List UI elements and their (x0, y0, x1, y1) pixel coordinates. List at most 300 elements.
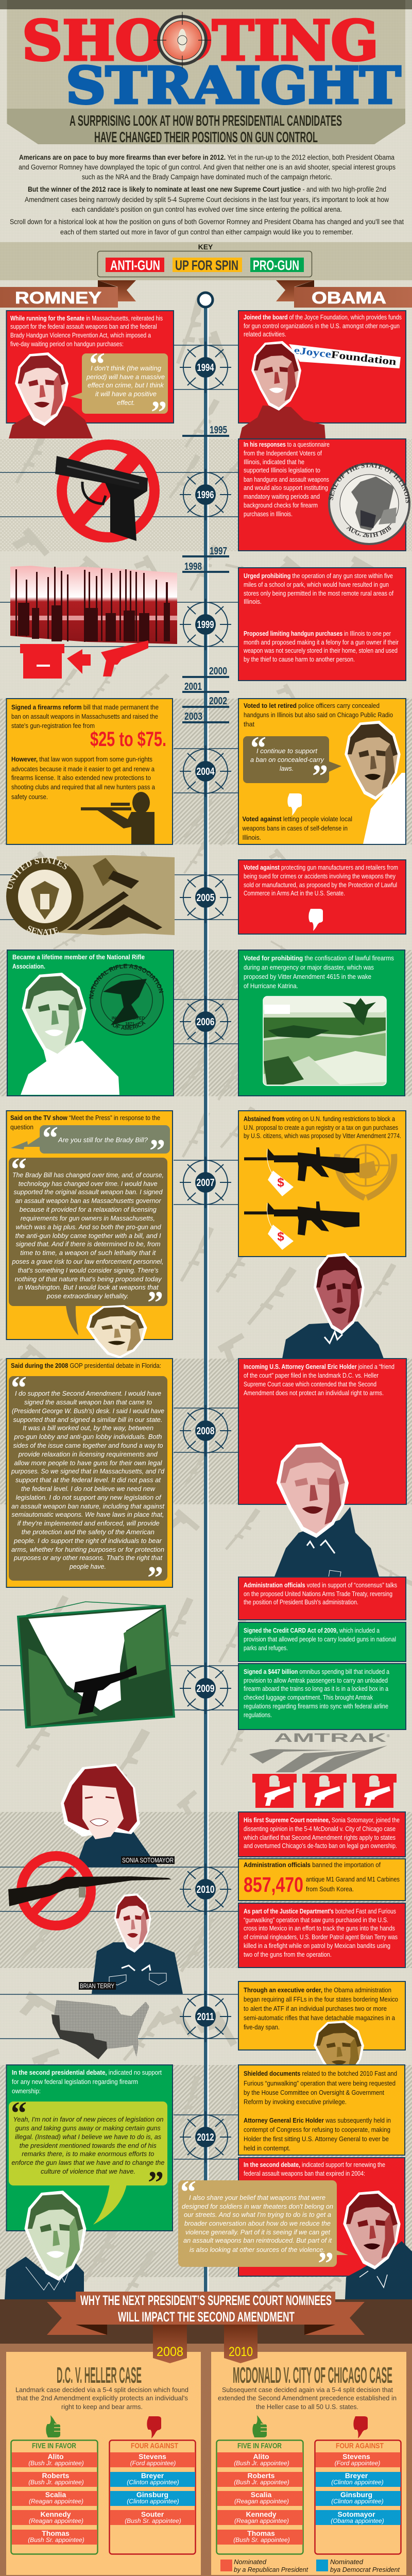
panel: Fast and Furious: As part of the Justice Department's botched Fast and Furious (244, 1907, 396, 1915)
legend: Republican: Nominated (234, 2558, 267, 2566)
portrait: Obama 1994 (239, 341, 325, 438)
icon: gun lock box with arrow (20, 640, 148, 679)
vote box: five in favor: (Reagan appointee) (29, 2517, 83, 2524)
text: purchase limits: by the thief to cause harm to another person. (244, 655, 355, 663)
icon: shooter (81, 792, 154, 844)
seal: NRA: 1871 (125, 1022, 134, 1026)
tick: 1995: 1995 (210, 425, 227, 436)
text: questionnaire: mandatory waiting periods and (244, 493, 320, 500)
panel: Romney 2007 (6, 1111, 173, 1340)
callout: fee: $25 to $75. (90, 728, 166, 751)
quote bubble: the president mentioned towards the end of his (20, 2142, 157, 2149)
panel: Obama 2006 (238, 950, 405, 1096)
text: contempt of Congress: Holder the first sitting U.S. Attorney General to ever be (244, 2135, 389, 2143)
portrait: Bush (274, 1443, 379, 1583)
year marker: 2010: 2010 (197, 1884, 214, 1895)
key label: KEY (198, 243, 213, 251)
quote bubble: legislation. I do not support any new legislation of (16, 1494, 162, 1501)
text: shielded documents: Reform by invoking executive privilege. (244, 2098, 347, 2106)
tick: 2001: 2001 (184, 681, 202, 692)
legend: Democrat: Nominated (330, 2558, 364, 2566)
tick: 2003 (182, 711, 229, 723)
description (218, 2386, 397, 2411)
answer bubble: ” (147, 1285, 163, 1320)
quote bubble: people have. (69, 1563, 106, 1570)
panel: executive order: semi-automatic rifles that have detachable magazines in a (244, 2014, 396, 2022)
emblem: United Nations (337, 1145, 394, 1198)
year marker: 2007 (180, 1157, 231, 1208)
panel: Romney 2008 (6, 1359, 173, 1596)
year marker: 2004 (180, 745, 231, 797)
quote bubble: semiautomatic weapons. We have laws in place that, (11, 1511, 164, 1518)
quote bubble: laws. (280, 765, 294, 772)
timeline start marker (198, 293, 213, 307)
year marker: 2005 (180, 872, 231, 923)
ban sign with pistol (55, 445, 154, 541)
tick: 2000: 2000 (209, 666, 227, 677)
tick: 1998: 1998 (184, 561, 202, 572)
vote box: five in favor: (Bush Jr. appointee) (234, 2479, 289, 2486)
icon: thumbs down (287, 793, 302, 816)
panel: Romney 2012 (6, 2065, 173, 2231)
text: retired police: Voted to let retired police officers carry concealed (244, 702, 380, 709)
ribbon tag: 2010: 2010 (229, 2345, 253, 2359)
seal: Illinois (328, 463, 410, 545)
question bubble: ” (149, 1133, 165, 1168)
text: Joyce board (244, 313, 402, 338)
intro text: But the winner of the 2012 race is likely to nominate at least one new Supreme Court justice - and with two high-profile 2nd (28, 185, 386, 193)
logo: Amtrak: AMTRAK (274, 1731, 387, 1745)
quote bubble: Obama 2012: designed for soldiers in war theaters don't belong on (182, 2202, 333, 2210)
vote box: four against: (Bush Sr. appointee) (125, 2517, 181, 2524)
quote bubble: pro-gun lobby and anti-gun lobby individuals. Both (14, 1433, 162, 1440)
vote box: four against (109, 2440, 196, 2554)
year marker: 2006: 2006 (197, 1016, 214, 1028)
year marker: 2012 (180, 2111, 231, 2163)
panel: executive order (238, 1981, 405, 2050)
banner: Supreme Court heading (47, 2292, 365, 2335)
quote bubble (71, 347, 168, 430)
panel: import ban (238, 1859, 405, 1901)
panel: Obama 2005 (238, 860, 406, 934)
text: questionnaire (244, 440, 330, 518)
text: firearms reform: state's gun-registration fee from (11, 722, 95, 730)
text: voted against (242, 815, 352, 841)
answer bubble: “ (11, 1152, 27, 1187)
text: contempt of Congress: held in contempt. (244, 2144, 290, 2152)
image: US Senate seal and pistol: UNITED STATES (6, 857, 68, 889)
quote bubble (9, 1370, 167, 1596)
year marker: 1994: 1994 (197, 362, 214, 374)
panel: omnibus bill: regulations regarding firearms into sync with federal airline (244, 1702, 388, 1710)
brown band and lower section (0, 2299, 412, 2576)
text: lawful commerce: Commerce in Arms Act in the U.S. Senate. (244, 889, 345, 897)
description: the Heller case to all 50 U.S. states. (256, 2403, 358, 2411)
vote box: four against: Sotomayor (337, 2510, 375, 2518)
text: purchase limits (243, 630, 399, 663)
panel: omnibus bill: provision to allow Amtrak passengers to carry an unloaded (244, 1676, 388, 1684)
text: questionnaire: ban handguns and assault weapons (244, 476, 329, 483)
panel: Obama 2004 (238, 699, 406, 844)
vote box: four against: Ginsburg (136, 2490, 168, 2499)
vote box: five in favor: (Bush Sr. appointee) (28, 2536, 84, 2544)
panel: Romney 2004 (6, 699, 173, 844)
text: rifles from Korea: from South Korea. (306, 1885, 354, 1893)
year marker: 2012: 2012 (197, 2132, 214, 2143)
ribbon: Obama: OBAMA (312, 289, 386, 307)
text: firearms reform: Signed a firearms reform bill that made permanent the (11, 703, 159, 711)
text: contempt of Congress: Attorney General Eric Holder was subsequently held in (244, 2116, 391, 2124)
quote bubble: ” (147, 1561, 163, 1596)
ribbon tag: 2008: 2008 (157, 2345, 183, 2359)
icon: thumbs down (147, 2416, 161, 2438)
tick: 2002 (182, 696, 229, 708)
legend: Republican (220, 2558, 308, 2573)
panel: Credit CARD Act: parks and refuges. (244, 1644, 288, 1652)
panel: Credit CARD Act: Signed the Credit CARD Act of 2009, which included a (244, 1626, 380, 1634)
text: voted against: weapons bans in cases of self-defense in (242, 824, 348, 832)
vote box: four against: (Clinton appointee) (331, 2498, 384, 2505)
text: retired police: handguns in Illinois but also said on Chicago Public Radio (244, 711, 393, 719)
quote bubble: illegal. (Instead) what I believe we have to do is, as (15, 2133, 161, 2141)
panel: Obama 2007 (238, 1111, 406, 1257)
vote box: five in favor: Kennedy (40, 2510, 71, 2518)
text: however: However, that law won support from some gun-rights (11, 755, 152, 763)
intro text: Amendment cases being narrowly decided by split 5-4 Supreme Court decisions in the last four years, it's important to look at how (25, 196, 389, 204)
text: shielded documents: Furious “gunwalking” operation that were being requested (244, 2079, 396, 2087)
legend: Democrat (316, 2558, 400, 2573)
text: NRA membership (12, 953, 145, 970)
text: gun stores: Urged prohibiting the operation of any gun store within five (244, 572, 393, 580)
vote box: five in favor: FIVE IN FAVOR (237, 2442, 282, 2450)
quote bubble: period) will have a massive (86, 373, 165, 381)
logo: Joyce Foundation: eJoyce Foundation (293, 345, 397, 368)
text: friend of the court: Amendment does not protect an individual right to arms. (244, 1389, 384, 1397)
text: Katrina vote (244, 954, 394, 990)
rifle with price tag: $ (277, 1176, 284, 1190)
vote box: four against: Breyer (141, 2471, 164, 2480)
text: however (11, 755, 156, 801)
vote box: four against: Breyer (345, 2471, 368, 2480)
text: questionnaire: and would also support instituting (244, 484, 328, 492)
text: contempt of Congress (244, 2116, 391, 2152)
vote box: five in favor: FIVE IN FAVOR (32, 2442, 76, 2450)
answer bubble: which was a big plus. And so both the pro-gun and (16, 1223, 161, 1231)
panel: Credit CARD Act (238, 1622, 406, 1662)
text: second debate: for any new federal legislation regarding firearm (12, 2078, 138, 2086)
text: however: shooting clubs and required that all new hunters pass a (11, 783, 156, 791)
text: friend of the court: Incoming U.S. Attorney General Eric Holder joined a “friend (244, 1363, 394, 1370)
quote bubble: guns and taking guns away or making certain guns (15, 2124, 161, 2132)
text: second debate: ownership: (12, 2087, 41, 2095)
question bubble: “ (42, 1121, 58, 1156)
text: lawful commerce (244, 863, 398, 897)
text: Senate run: Brady Handgun Violence Prevention Act, which imposed a (10, 331, 151, 339)
icon: thumbs down (308, 909, 323, 931)
text: Senate run (10, 314, 163, 348)
text: Katrina vote: proposed by Vitter Amendment 4615 in the wake (244, 973, 371, 980)
answer bubble: because it provided for a relaxation of licensing (20, 1206, 157, 1213)
vote box: five in favor: (Bush Jr. appointee) (28, 2479, 84, 2486)
quote bubble: Obama 2012: “ (180, 2175, 196, 2210)
quote bubble: the federal level. I do not believe we need new (21, 1485, 156, 1493)
portrait: Brian Terry (92, 1893, 183, 1994)
year marker: 2010 (180, 1863, 231, 1915)
text: purchase limits: Proposed limiting handgun purchases in Illinois to one per (244, 630, 391, 637)
text: Senate run: support for the federal assault weapons ban and the federal (10, 323, 157, 330)
answer bubble: time to time, a weapon of such lethality that it (20, 1249, 157, 1257)
year marker: 2004: 2004 (197, 766, 215, 777)
vote box: four against: (Ford appointee) (335, 2460, 380, 2467)
panel: Fast and Furious: two of the guns from the operation. (244, 1951, 332, 1958)
answer bubble: pose extraordinary lethality. (46, 1292, 129, 1300)
vote box: five in favor (11, 2440, 98, 2554)
text: retired police (244, 702, 393, 728)
year marker: 2011 (180, 1991, 231, 2042)
title: SHOOTING (22, 8, 379, 73)
map: US with border states (52, 2000, 149, 2059)
vote box: five in favor: Thomas (247, 2529, 275, 2537)
logo: Amtrak (249, 1731, 390, 1772)
quote bubble: Obama 2012: I also share your belief that weapons that were (189, 2194, 325, 2201)
key box (98, 251, 312, 277)
quote bubble: (President George W. Bush's) desk. I said I would have (12, 1407, 164, 1415)
text: Meet the Press (10, 1114, 160, 1131)
description: that the 2nd Amendment explicitly protects an individual's (16, 2394, 188, 2402)
icon: target scope over the O (153, 12, 211, 69)
text: gun stores (244, 572, 393, 605)
rifle with price tag: $ (277, 1230, 284, 1244)
text: firearms reform (11, 703, 159, 730)
chip: pro-gun: PRO-GUN (253, 258, 299, 273)
answer bubble: signed that. And if there is determined to be, from (16, 1240, 161, 1248)
quote bubble: “ (250, 731, 266, 766)
vote box: four against: (Clinton appointee) (127, 2498, 179, 2505)
panel: Administration UN talks: Administration officials voted in support of “consensus” talks (244, 1581, 397, 1589)
answer bubble: supported the original assault weapon ban. I signed (13, 1188, 163, 1196)
panel: Administration UN talks (238, 1577, 406, 1620)
text: Joyce board: related activities. (244, 330, 286, 338)
image: US Senate seal and pistol (6, 855, 175, 935)
intro text (10, 154, 404, 236)
icons: locked gun boxes (252, 1774, 397, 1808)
year marker: 1999 (180, 599, 231, 650)
text: firearms reform: ban on assault weapons in Massachusetts and raised the (11, 713, 158, 720)
panel: Obama 2008 (238, 1359, 406, 1504)
panel: executive order: Through an executive order, the Obama administration (244, 1986, 391, 1994)
chip: up for spin: UP FOR SPIN (175, 258, 238, 273)
text: rifles from Korea (306, 1875, 400, 1893)
portrait: Obama sepia (345, 721, 405, 844)
quote bubble: I do support the Second Amendment. I would have (15, 1389, 161, 1397)
quote bubble: “ (11, 2096, 27, 2131)
quote bubble: a ban on concealed-carry (250, 756, 324, 764)
answer bubble: nothing of that nature that's being proposed today (15, 1275, 162, 1283)
year marker: 2006 (180, 996, 231, 1047)
quote bubble: Obama 2012: is also looking at other sources of the violence. (190, 2246, 325, 2253)
panel: Fast and Furious (238, 1903, 405, 1968)
text: friend of the court (244, 1363, 394, 1397)
text: shielded documents: Shielded documents related to the botched 2010 Fast and (244, 2070, 397, 2077)
text: contempt of Congress: contempt of Congress for refusing to cooperate, making (244, 2126, 390, 2133)
panel: Heller case: D.C. V. HELLER CASE (57, 2363, 142, 2388)
vote box: five in favor: (Reagan appointee) (234, 2498, 289, 2505)
description: Subsequent case decided again via a 5-4 split decision that (222, 2386, 393, 2394)
subtitle (70, 113, 342, 146)
quote bubble: allow more people to have guns for their own legal (14, 1459, 163, 1467)
answer bubble: technology has changed over time. I would have (19, 1180, 158, 1188)
timeline spine (204, 308, 209, 2333)
vote box: four against: Stevens (139, 2452, 166, 2461)
question bubble: Are you still for the Brady Bill? (58, 1136, 148, 1144)
description: right to keep and bear arms. (61, 2403, 143, 2411)
text: Senate run: While running for the Senate in Massachusetts, reiterated his (10, 314, 163, 322)
rifle with price tag (244, 1201, 359, 1250)
quote bubble: ” (312, 759, 328, 794)
tick: 1995 (182, 425, 229, 437)
vote box: five in favor: Scalia (45, 2490, 66, 2499)
answer bubble: requirements for gun owners in Massachusetts, (21, 1214, 155, 1222)
tick: 2000 (182, 666, 229, 678)
ban sign with M1 rifle (8, 1856, 171, 1926)
portrait: Sotomayor (61, 1764, 158, 1867)
quote bubble: people. I do support the right of individuals to bear (13, 1537, 162, 1545)
panel: Obama 2012 documents (238, 2065, 405, 2155)
photo: hurricane damage (263, 996, 386, 1086)
quote bubble: supported that and signed a similar bill in our state. (13, 1416, 163, 1423)
year marker: 2005: 2005 (197, 892, 214, 904)
seal: NRA: OF AMERICA (113, 1021, 146, 1030)
intro text: each candidate's position on gun control has evolved over time since entering the political arena. (72, 206, 342, 213)
vote box: four against (315, 2440, 401, 2554)
quote bubble: remarks there, is to make enormous efforts to (22, 2150, 154, 2158)
quote bubble: I continue to support (256, 747, 318, 755)
quote bubble: purposes or any other reasons. That's the right that (13, 1554, 163, 1562)
answer bubble: The Brady Bill has changed over time, and, of course, (12, 1171, 164, 1179)
quote bubble: ” (151, 395, 167, 430)
text: second debate: In the second presidential debate, indicated no support (12, 2069, 162, 2076)
panel: Sotomayor nominee (238, 1812, 405, 1857)
ribbon: Obama (276, 280, 412, 308)
textured bands (0, 439, 412, 2277)
quote bubble: effect. (117, 399, 135, 406)
portrait: Romney 1994 (9, 352, 93, 438)
quote bubble (243, 731, 341, 794)
key band (0, 242, 412, 280)
panel: Obama 2012 assault ban (238, 2158, 405, 2276)
answer bubble: poses a grave risk to our law enforcement personnel, (12, 1258, 164, 1265)
vote box: four against: Souter (141, 2510, 164, 2518)
text: Katrina vote: of Hurricane Katrina. (244, 982, 298, 990)
quote bubble: signed the assault weapon ban that came to (24, 1398, 152, 1406)
year marker: 2009: 2009 (197, 1683, 214, 1694)
vote box: five in favor: Alito (253, 2452, 269, 2461)
image: gun rack (10, 566, 177, 644)
tick: 1998 (182, 561, 229, 573)
vote box: four against: Stevens (342, 2452, 370, 2461)
year marker: 2008: 2008 (197, 1426, 214, 1437)
quote bubble: Obama 2012: ” (318, 2246, 334, 2281)
emblem connector lines (0, 345, 238, 2159)
quote bubble: sides of the issue came together and found a way to (13, 1442, 163, 1449)
legend: Republican: by a Republican President (234, 2566, 308, 2573)
legend: Democrat: bya Democrat President (330, 2566, 400, 2573)
text: Meet the Press: question (10, 1123, 33, 1131)
text: shielded documents: by the House Committee on Oversight & Government (244, 2089, 384, 2096)
text: questionnaire: background checks for firearm (244, 501, 318, 509)
text: NRA membership: Became a lifetime member of the National Rifle (12, 953, 145, 961)
text: questionnaire: Illinois, indicated that he (244, 458, 304, 466)
banner: Supreme Court heading: WILL IMPACT THE SECOND AMENDMENT (118, 2309, 295, 2325)
year marker: 1994 (180, 342, 231, 393)
chip: anti-gun: ANTI-GUN (110, 258, 160, 273)
year marker: 2007: 2007 (197, 1177, 214, 1189)
portrait: Romney in polo (21, 973, 119, 1095)
quote bubble: enforce the gun laws that we have and to change the (11, 2159, 164, 2166)
vote box: four against: (Clinton appointee) (127, 2479, 179, 2486)
text: Katrina vote: Voted for prohibiting the confiscation of lawful firearms (244, 954, 394, 962)
tick: 1997 (182, 546, 229, 557)
vote box: five in favor: (Bush Sr. appointee) (233, 2536, 290, 2544)
text: friend of the court: Supreme Court case which contended that the Second (244, 1380, 376, 1388)
intro text: such as the NRA and the Brady Campaign have dominated much of the campaign rhetoric. (82, 173, 332, 181)
vote box: five in favor: Roberts (248, 2471, 275, 2480)
text: questionnaire: from the Independent Voters of (244, 449, 322, 457)
year marker: 1996 (180, 469, 231, 520)
ribbon tag: 2008 (153, 2325, 187, 2363)
vote box: five in favor: (Bush Jr. appointee) (28, 2460, 84, 2467)
vote box: five in favor: Kennedy (246, 2510, 277, 2518)
rifle with price tag (244, 1147, 359, 1196)
vote box: five in favor: (Reagan appointee) (29, 2498, 83, 2505)
vote box: four against: (Clinton appointee) (331, 2479, 384, 2486)
header top bar (0, 0, 412, 9)
seal: NRA (89, 963, 164, 1036)
image: national park book with pistol (18, 1602, 174, 1727)
panel: Obama 2012 assault ban: federal assault weapons ban that expired in 2004: (244, 2170, 365, 2177)
ribbon: Romney (0, 280, 136, 308)
vote box: five in favor: Roberts (42, 2471, 70, 2480)
panel: Romney 1994 (6, 311, 174, 430)
text: shielded documents (244, 2070, 397, 2106)
icon: thumbs up (252, 2415, 267, 2437)
panel: executive order: to alert the ATF if an individual purchases two or more (244, 2005, 387, 2012)
text: Senate run: five-day waiting period on handgun purchases: (10, 340, 124, 348)
text: GOP debate: Said during the 2008 GOP presidential debate in Florida: (11, 1362, 161, 1369)
year marker: 1999: 1999 (197, 619, 214, 631)
tick: 2003: 2003 (184, 711, 202, 722)
text: questionnaire: purchases in Illinois. (244, 510, 293, 518)
text: questionnaire: supported Illinois legislation to (244, 466, 320, 474)
text: however: safety course. (11, 793, 48, 801)
icon: thumbs down (353, 2416, 368, 2438)
vote box: five in favor: (Reagan appointee) (234, 2517, 289, 2524)
quote bubble: Obama 2012: an assault weapons ban reintroduced. But part of it (183, 2236, 332, 2244)
tick: 1997: 1997 (210, 546, 227, 557)
quote bubble: provide relaxation in licensing requirements and (18, 1450, 158, 1458)
text: gun stores: Illinois. (244, 598, 262, 605)
answer bubble: in Washington. But I would look at weapons that (18, 1283, 159, 1291)
text: NRA membership: Association. (12, 962, 45, 970)
text: however: advocates because it made it easier to get and renew a (11, 765, 155, 773)
tick: 2002: 2002 (209, 696, 227, 707)
text: Katrina vote: during an emergency or major disaster, which was (244, 963, 374, 971)
quote bubble: “ (89, 347, 105, 382)
vote box: five in favor: (Bush Jr. appointee) (234, 2460, 289, 2467)
quote bubble: the protection and the safety of the American (22, 1528, 154, 1536)
text: questionnaire: In his responses to a questionnaire (244, 440, 330, 448)
description (15, 2386, 188, 2411)
